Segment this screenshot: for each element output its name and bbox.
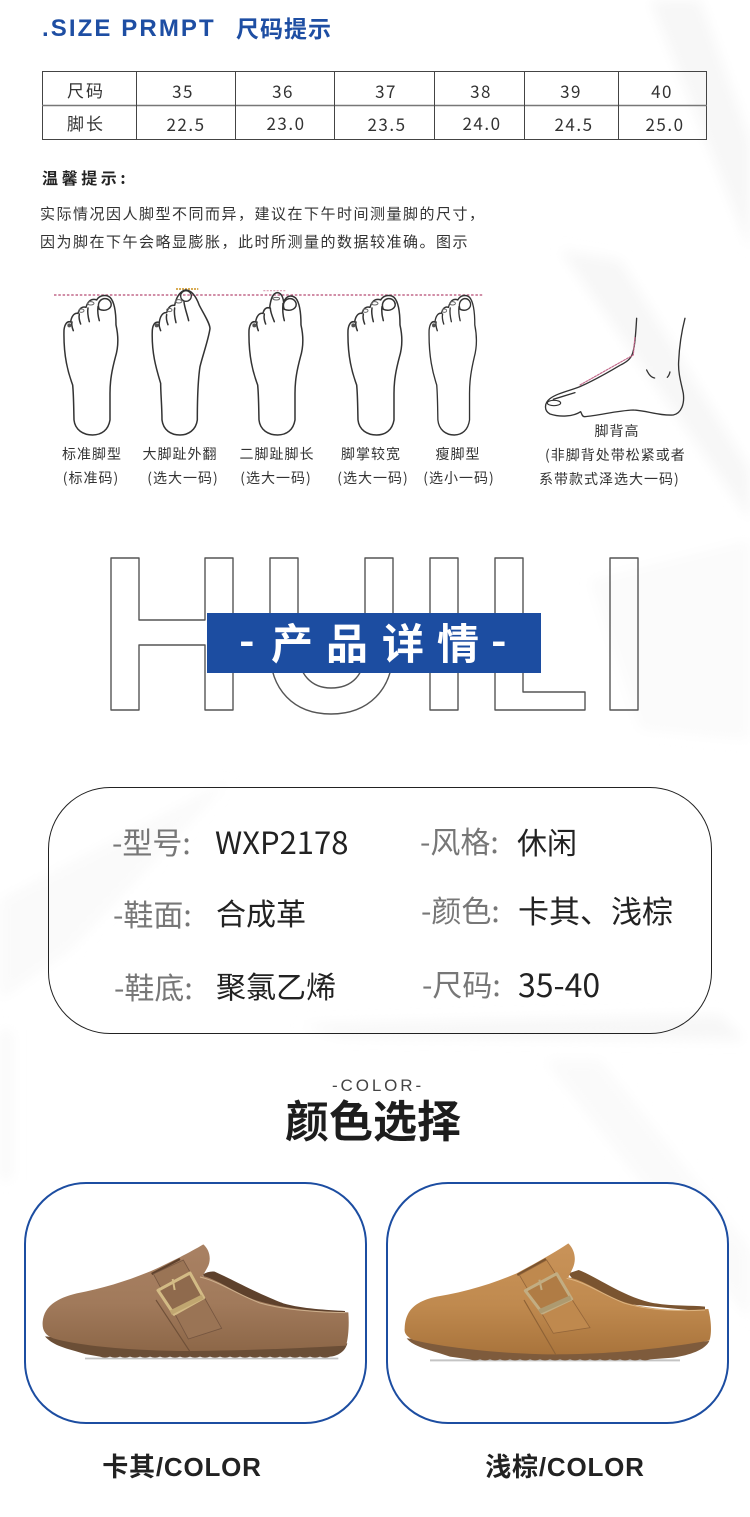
spec: sole: -鞋底: [114, 964, 193, 1008]
card: khaki shoe [24, 1182, 367, 1424]
collar interior [568, 1270, 705, 1312]
spec: color: -颜色: [421, 887, 500, 931]
text block: measuring advice: 实际情况因人脚型不同而异，建议在下午时间测量脚的尺寸， [40, 203, 486, 224]
size table: 尺码 [67, 77, 105, 102]
spec: upper: -鞋面: [113, 891, 192, 935]
strap [519, 1260, 590, 1333]
heading: warm tip: 温馨提示: [42, 165, 129, 189]
banner: product details: - [239, 608, 255, 669]
strap [153, 1260, 222, 1339]
foot type labels: 二脚趾脚长 [240, 444, 314, 464]
size table: 24.5 [554, 111, 594, 136]
spec: color value: 卡其、浅棕 [518, 887, 673, 932]
size table: 25.0 [645, 111, 685, 136]
spec: style value: 休闲 [517, 819, 577, 863]
size table: 22.5 [166, 111, 206, 136]
text block: measuring advice [40, 203, 486, 252]
banner: product details: 产 [271, 611, 313, 672]
shoe upper [43, 1244, 349, 1351]
size table: 35 [172, 78, 194, 103]
size table: 36 [272, 78, 294, 103]
outlined word HUILI [110, 557, 639, 715]
spec: upper value: 合成革 [216, 890, 306, 934]
label: light brown: 浅棕/COLOR [485, 1452, 645, 1482]
size table: 23.5 [367, 111, 407, 136]
foot type labels [62, 444, 495, 488]
foot: wide [348, 295, 402, 435]
spec: size value: 35-40 [518, 961, 600, 1007]
color subtitle: -COLOR- [332, 1076, 424, 1095]
foot type diagrams [54, 288, 686, 436]
size table: 23.0 [266, 110, 306, 135]
foot type labels: 大脚趾外翻 [142, 444, 218, 464]
side view foot [545, 318, 685, 417]
foot type labels: (选大一码) [147, 468, 219, 488]
ground shadow [430, 1359, 680, 1361]
banner: product details [207, 613, 541, 673]
foot type labels: (标准码) [63, 468, 119, 488]
size table: 24.0 [462, 110, 502, 135]
title: size prompt: 尺码提示 [236, 16, 332, 42]
size table: 38 [470, 78, 492, 103]
size table: 37 [375, 78, 397, 103]
title: size prompt: .SIZE PRMPT [42, 15, 216, 42]
banner: product details: 详 [382, 611, 424, 672]
collar interior [203, 1271, 345, 1314]
spec: model: -型号: [112, 819, 191, 863]
buckle [158, 1273, 204, 1314]
foot type labels: (选大一码) [240, 468, 312, 488]
buckle [525, 1274, 572, 1313]
instep label: (非脚背处带松紧或者 [545, 445, 686, 465]
banner: product details: 品 [326, 611, 368, 672]
spec: model value: WXP2178 [215, 818, 348, 863]
panel: product specs [48, 787, 712, 1034]
label: khaki: 卡其/COLOR [102, 1452, 262, 1482]
banner: product details: 情 [437, 611, 479, 672]
foot type labels: 瘦脚型 [436, 444, 480, 464]
shoe sole [407, 1338, 709, 1360]
foot: bunion [152, 289, 210, 435]
spec: size: -尺码: [422, 961, 501, 1005]
instep label: 系带款式泽选大一码) [539, 469, 680, 489]
foot type labels: (选小一码) [423, 468, 495, 488]
instep label [539, 421, 686, 489]
shoe sole [45, 1336, 347, 1358]
title: size prompt [42, 15, 618, 715]
spec: style: -风格: [420, 818, 499, 862]
size table: 脚长 [67, 110, 105, 135]
card: light brown shoe [386, 1182, 729, 1424]
ground shadow [85, 1358, 338, 1359]
measuring line [54, 294, 484, 296]
heading: color selection: 颜色选择 [285, 1098, 461, 1147]
shoe upper [405, 1243, 711, 1354]
foot: long second toe [249, 291, 303, 435]
size table: 40 [651, 78, 673, 103]
foot type labels: 标准脚型 [62, 444, 122, 464]
spec: sole value: 聚氯乙烯 [216, 963, 336, 1007]
foot type labels: 脚掌较宽 [341, 444, 401, 464]
banner: product details: - [491, 608, 507, 669]
size table [42, 71, 707, 140]
size table: 39 [560, 78, 582, 103]
foot: standard [64, 295, 118, 435]
text block: measuring advice: 因为脚在下午会略显膨胀，此时所测量的数据较准确。图示 [40, 231, 469, 252]
foot type labels: (选大一码) [337, 468, 409, 488]
foot: thin [429, 295, 476, 435]
instep label: 脚背高 [594, 421, 640, 441]
